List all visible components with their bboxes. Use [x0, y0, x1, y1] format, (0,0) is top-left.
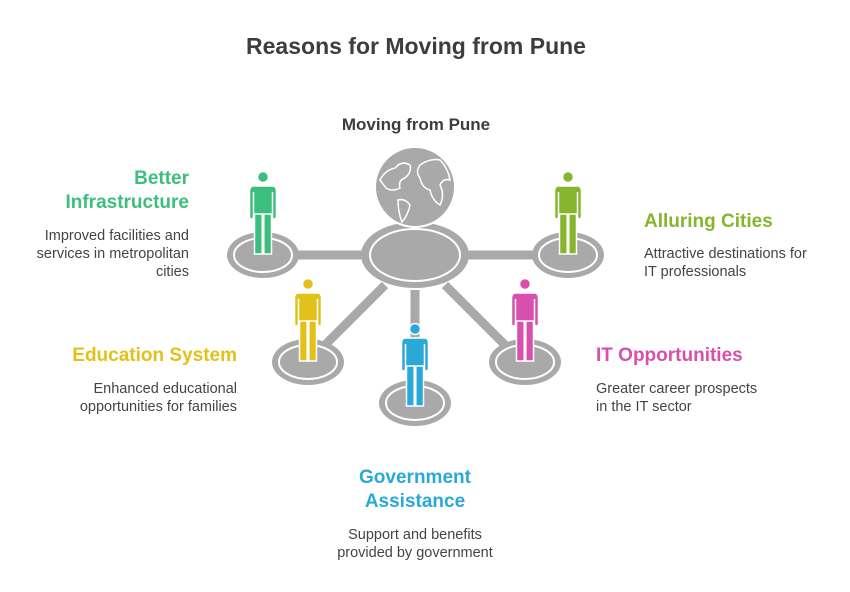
text: Better Infrastructure — [37, 168, 190, 280]
text: IT Opportunities: IT Opportunities — [596, 345, 743, 366]
text: IT Opportunities: Greater career prospects — [596, 381, 757, 397]
text: Better Infrastructure: Infrastructure — [65, 192, 189, 213]
hub — [361, 222, 469, 288]
text: Government Assistance: Government — [359, 467, 472, 488]
text: Alluring Cities: Alluring Cities — [644, 211, 773, 232]
text: Education System: Education System — [72, 345, 237, 366]
text: Alluring Cities: IT professionals — [644, 264, 746, 280]
text: Better Infrastructure: Better — [134, 168, 190, 189]
connectors — [290, 255, 540, 380]
icon: people — [250, 172, 582, 406]
title: Reasons for Moving from Pune — [246, 33, 586, 59]
text: Education System: Enhanced educational — [93, 381, 237, 397]
text: IT Opportunities — [596, 345, 757, 415]
text: Government Assistance: provided by government — [337, 545, 493, 561]
text: Government Assistance — [337, 467, 493, 561]
text: Alluring Cities — [644, 211, 807, 280]
text: Better Infrastructure: cities — [156, 264, 189, 280]
text: Education System — [72, 345, 237, 415]
text: Government Assistance: Assistance — [365, 491, 465, 512]
text: Education System: opportunities for families — [80, 399, 237, 415]
text: Better Infrastructure: services in metropolitan — [37, 246, 189, 262]
text: Government Assistance: Support and benefits — [348, 527, 482, 543]
platforms — [227, 232, 604, 426]
icon: globe — [375, 147, 455, 227]
text: Better Infrastructure: Improved facilities and — [45, 228, 189, 244]
text: IT Opportunities: in the IT sector — [596, 399, 692, 415]
center label: Moving from Pune — [342, 115, 490, 134]
text: Alluring Cities: Attractive destinations for — [644, 246, 807, 262]
